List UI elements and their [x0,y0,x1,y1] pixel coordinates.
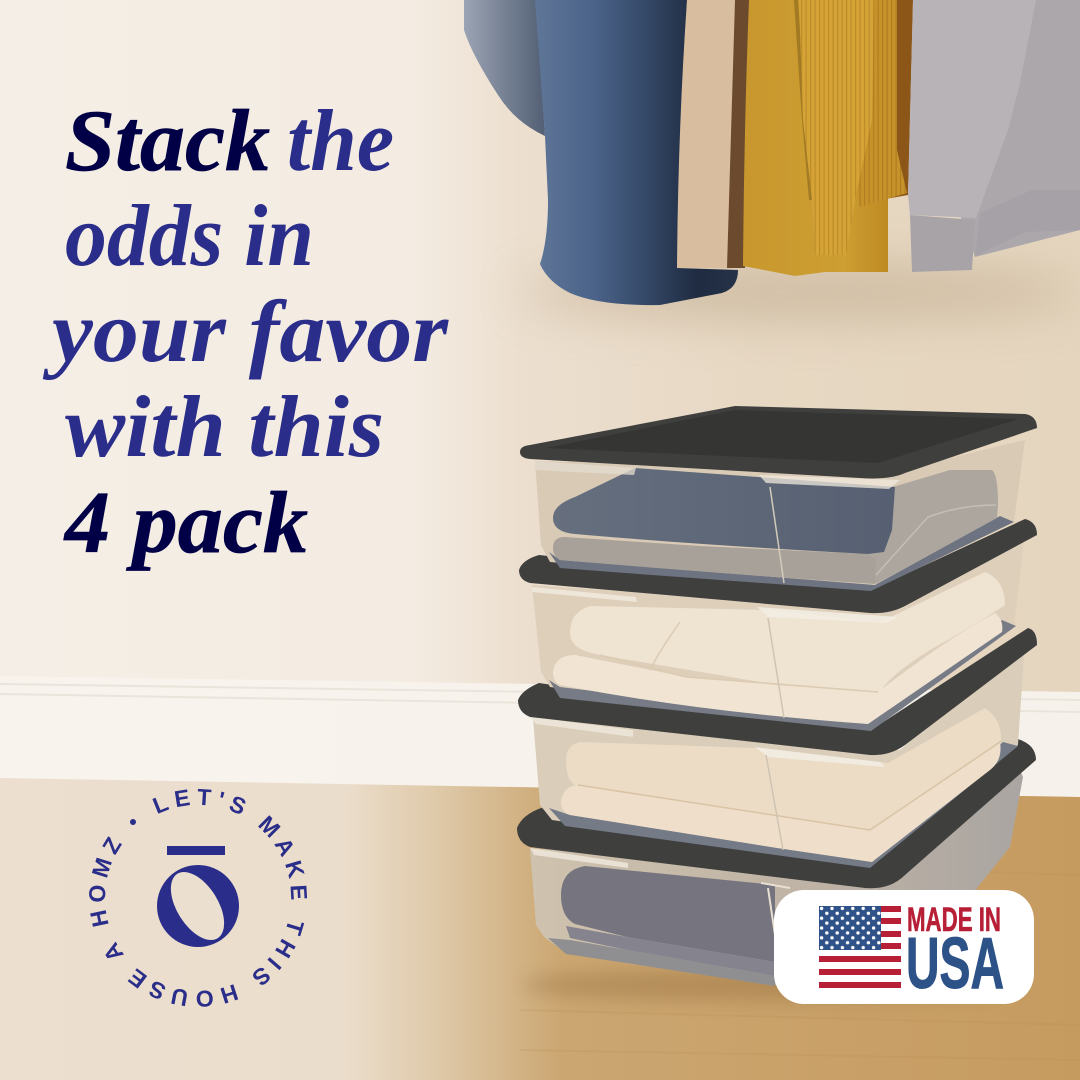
bin 2 [519,519,1037,731]
bin 4 bottom [517,739,1036,986]
line 2: odds in [65,188,314,285]
line 3: your favor [43,284,449,381]
gray cuff [910,215,975,272]
bin body [530,745,1023,985]
gray right fold [860,470,998,584]
mustard top [743,0,888,276]
wood floor [0,778,1080,1080]
logo macron [167,846,225,855]
tray base [549,516,1014,591]
line 4: with this [65,379,384,476]
line 1: Stack [65,93,270,190]
gray folded contents [561,866,775,962]
tray base [548,938,775,986]
wall shading near clothes [520,266,1080,318]
dot separator [130,819,136,825]
soft shadow under stack [520,969,1020,1001]
bin body [535,440,1025,590]
made in usa badge [774,890,1034,1004]
baseboard [0,676,1080,797]
knit back panel [856,0,907,207]
sleeve shadow [796,0,811,200]
line 1: the [287,93,394,190]
beige garment [677,0,736,268]
us flag [819,906,901,988]
lid [520,406,1037,478]
lid [519,519,1037,613]
line 1 [65,93,394,190]
tray base [549,620,1016,731]
bin 3 [518,628,1037,868]
storage bin stack [517,406,1037,986]
gray sleeve [908,0,1036,218]
usa text: USA [906,924,1004,1004]
gray sweatshirt body [960,0,1080,257]
lower sweater [553,613,1002,724]
circular slogan: LET'S MAKE THIS HOUSE A HOMZ [89,788,308,1007]
logo badge [89,788,308,1007]
headline [43,93,449,572]
upper sweater [566,708,1001,830]
lid [518,628,1037,755]
navy shirt [535,0,738,305]
knit sleeve [799,0,874,255]
brown shadow garment [727,0,750,268]
clear rim [530,848,628,868]
bin body [533,640,1025,867]
hanging clothes [464,0,1080,305]
upper sweater [570,572,1005,692]
lower sweater [561,742,1001,862]
line 5: 4 pack [63,475,308,572]
clear rim [757,607,898,623]
made in text: MADE IN [907,901,1001,939]
clear rim [755,747,885,767]
clear rim [534,461,636,475]
gray hem [975,190,1080,256]
tray base [549,742,1018,868]
brown back edge [880,0,913,200]
lid [517,739,1036,888]
tan folded item [553,537,876,584]
navy shirt back panel [464,0,545,136]
logo o [157,863,239,949]
bin 1 top [520,406,1037,591]
blue folded item [553,468,895,554]
bin body [532,530,1025,730]
